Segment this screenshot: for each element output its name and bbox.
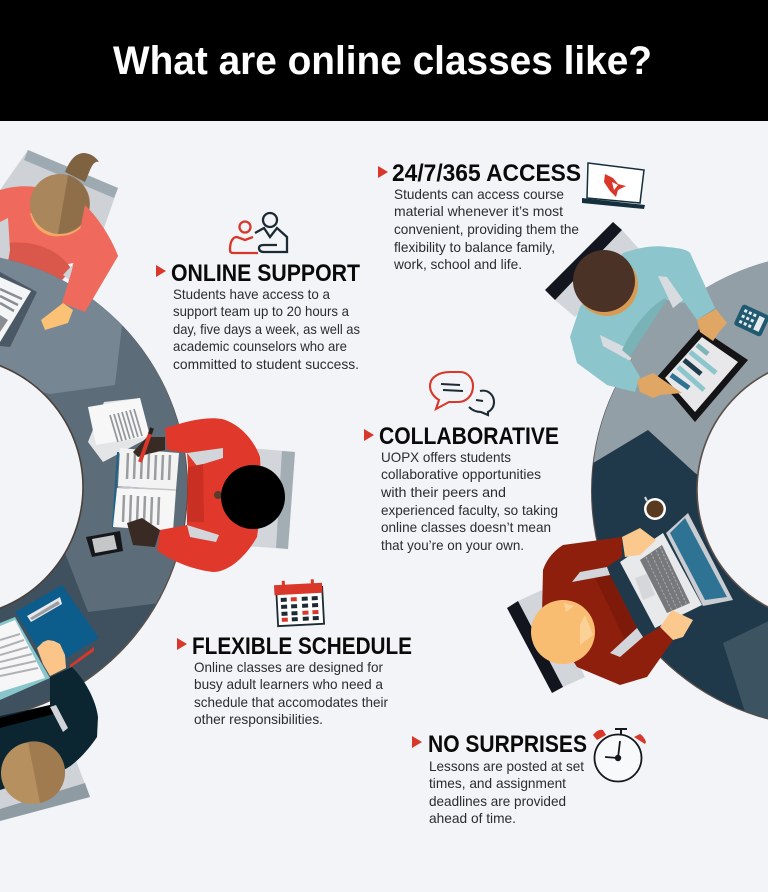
student: red sweater with laptop <box>507 528 693 693</box>
text: ahead of time. <box>429 810 516 826</box>
text: Online classes are designed for <box>194 659 383 675</box>
title banner: What are online classes like? <box>113 39 652 83</box>
tablet <box>657 328 748 422</box>
student: teal shirt body <box>570 246 715 392</box>
loose papers <box>88 398 150 462</box>
text: Students have access to a <box>173 286 330 302</box>
student: man in red sweater <box>127 418 285 572</box>
text: UOPX offers students <box>381 449 511 465</box>
title banner <box>0 0 768 121</box>
coffee cup <box>644 497 666 520</box>
arrow <box>364 429 374 441</box>
text: that you’re on your own. <box>381 537 524 553</box>
text: support team up to 20 hours a <box>173 303 349 319</box>
heading: 24/7/365 ACCESS <box>392 160 581 187</box>
arrow <box>156 265 166 277</box>
section: no surprises <box>412 729 646 826</box>
text: committed to student success. <box>173 356 359 372</box>
illustration: left table with students <box>0 150 295 821</box>
phone <box>86 531 123 557</box>
text: other responsibilities. <box>194 711 323 727</box>
icon: laptop with logo <box>582 163 645 209</box>
student: man in red sweater chair <box>245 448 295 549</box>
text <box>194 659 388 727</box>
folder and notebook <box>0 585 99 700</box>
text: work, school and life. <box>393 256 522 272</box>
text: Students can access course <box>394 186 564 202</box>
text: deadlines are provided <box>429 793 566 809</box>
text <box>380 449 558 553</box>
hands on tablet <box>637 309 727 398</box>
text: experienced faculty, so taking <box>381 502 558 518</box>
arrow <box>177 638 187 650</box>
student: man in navy jacket chair <box>0 745 90 821</box>
text: times, and assignment <box>429 775 566 791</box>
arrow <box>412 736 422 748</box>
arm and hand of woman <box>41 205 118 330</box>
text: academic counselors who are <box>173 338 347 354</box>
section: 24/7/365 access <box>378 160 645 272</box>
text: day, five days a week, as well as <box>173 321 360 337</box>
text: Lessons are posted at set <box>429 758 584 774</box>
icon: calendar <box>274 579 324 626</box>
arrow <box>378 166 388 178</box>
section: flexible schedule <box>177 579 412 727</box>
text: schedule that accomodates their <box>194 694 388 710</box>
text: material whenever it’s most <box>394 203 563 219</box>
illustration: right table with students <box>507 222 768 730</box>
laptop <box>620 513 733 628</box>
icon: speech bubbles <box>430 372 494 415</box>
heading: FLEXIBLE SCHEDULE <box>192 633 412 660</box>
student: man in navy jacket <box>0 640 98 804</box>
text: convenient, providing them the <box>394 221 579 237</box>
text: online classes doesn’t mean <box>381 519 551 535</box>
text <box>429 758 584 826</box>
text: with their peers and <box>380 484 506 500</box>
section: collaborative <box>364 372 559 553</box>
icon: two people <box>230 213 287 253</box>
text: busy adult learners who need a <box>194 676 383 692</box>
section: online support <box>156 213 360 372</box>
round table: right <box>585 250 768 730</box>
heading: ONLINE SUPPORT <box>171 260 360 287</box>
calculator <box>733 304 768 337</box>
chair: teal shirt student <box>545 222 640 317</box>
text <box>393 186 579 272</box>
heading: NO SURPRISES <box>428 731 587 758</box>
icon: stopwatch <box>593 729 646 782</box>
round table: left <box>0 258 188 716</box>
teal shirt: lap, head and sleeves over table <box>573 247 715 392</box>
open book <box>112 448 179 531</box>
text: collaborative opportunities <box>381 466 541 482</box>
heading: COLLABORATIVE <box>379 423 559 450</box>
document on left table <box>0 272 37 347</box>
text <box>173 286 360 372</box>
text: flexibility to balance family, <box>394 239 555 255</box>
student: woman in coral top <box>0 150 118 312</box>
